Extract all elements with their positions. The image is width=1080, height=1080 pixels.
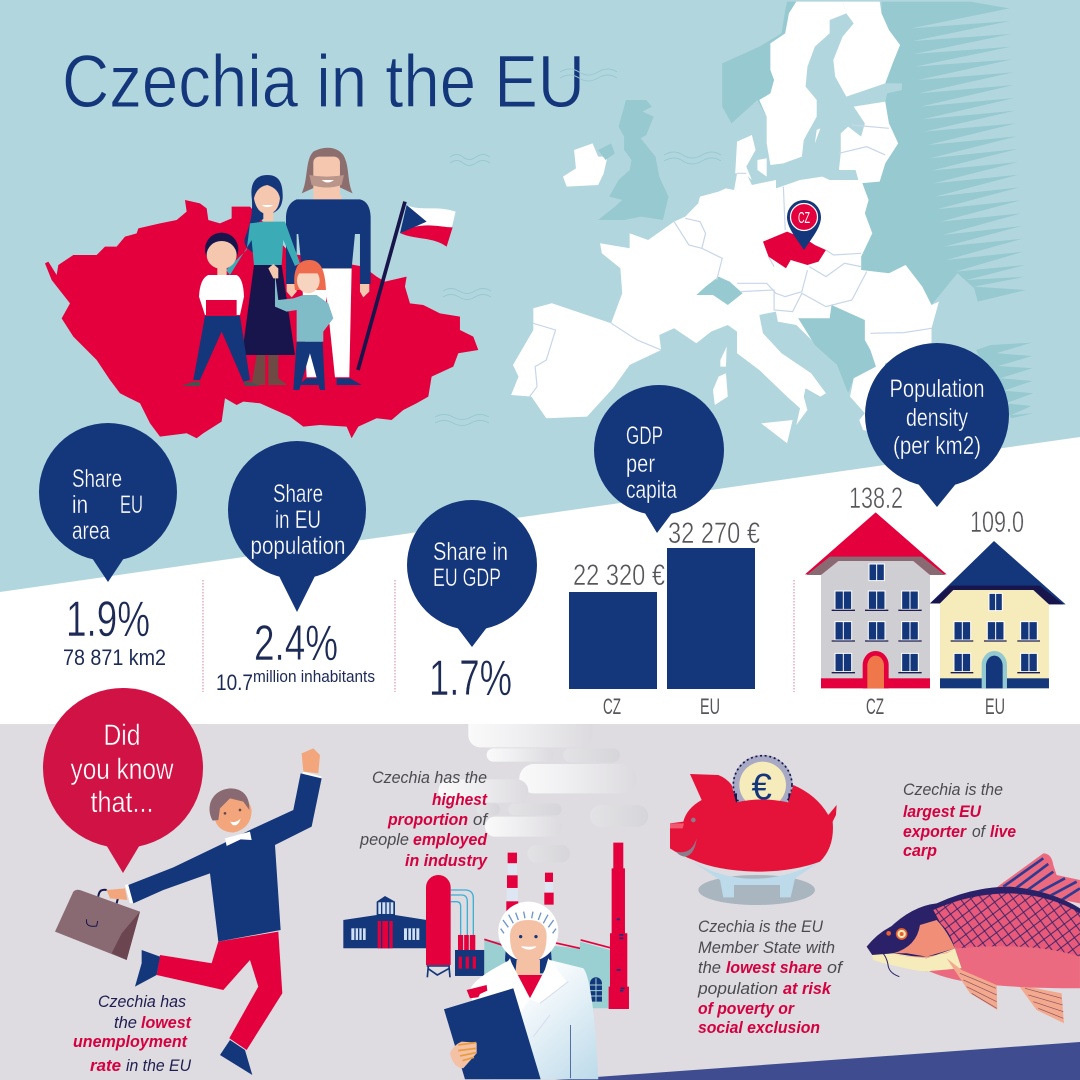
fact: highest proportion employed in industry: Czechia has the: [372, 768, 487, 787]
map of Europe: [511, 2, 1033, 443]
fact: highest proportion employed in industry: in industry: [405, 851, 488, 870]
Finland: [833, 2, 900, 97]
fact: lowest unemployment: [73, 992, 192, 1075]
dotted dividers: [203, 580, 794, 692]
Denmark: [735, 135, 756, 180]
value 109.0: 109.0: [970, 506, 1024, 539]
father: [286, 148, 371, 385]
bubble: did you know that: Did: [104, 719, 140, 752]
continental Europe: [511, 173, 939, 433]
piggy bank with euro coin: [670, 755, 837, 905]
Danish islands: [757, 158, 767, 177]
stat: population 2.4%: [216, 615, 375, 695]
bubble: share in EU area: in: [72, 491, 88, 519]
scales: [930, 892, 1080, 957]
bar chart: GDP per capita: 32 270 €: [668, 517, 760, 550]
striped chimneys: [506, 853, 554, 911]
fact: lowest unemployment: Czechia has: [98, 992, 186, 1011]
bubble: did you know that: you know: [70, 753, 174, 786]
bubble: share in EU area: Share: [72, 465, 122, 493]
flag and pole: [358, 202, 456, 370]
background: sky blue: [0, 0, 1080, 600]
fact: lowest share at risk of poverty: social exclusion: [698, 1018, 820, 1037]
bubble: share in EU population: in EU: [275, 506, 321, 534]
euro coin: [733, 755, 793, 815]
industry illustration: [343, 724, 648, 1079]
boy: [182, 233, 260, 386]
bubble: share in EU population: population: [250, 532, 346, 560]
pectoral fin: [947, 958, 997, 1010]
eye: [897, 929, 907, 939]
pig mouth: [676, 838, 697, 857]
fact: highest proportion employed in industry: people: [359, 830, 409, 849]
head: [867, 919, 962, 972]
dorsal fin: [997, 853, 1080, 903]
fact: highest proportion employed in industry: proportion: [387, 810, 468, 829]
bubble: share in EU area: [39, 423, 177, 582]
stat: area 1.9%: [63, 591, 166, 670]
carp fish: [867, 853, 1080, 1023]
Sweden: [759, 2, 846, 165]
stat: GDP 1.7%: 1.7%: [429, 650, 512, 706]
Corsica: [720, 347, 727, 367]
body: [927, 887, 1080, 988]
bubble: share in EU area: area: [72, 517, 110, 545]
Sardinia: [713, 373, 728, 405]
houses: population density comparison: [805, 482, 1066, 719]
fact: highest proportion employed in industry: employed: [413, 830, 488, 849]
briefcase: [55, 888, 140, 960]
Czech map with family: [45, 148, 478, 438]
fact: lowest share at risk of poverty: of poverty or: [698, 999, 795, 1018]
map pin: CZ: [787, 200, 821, 250]
Czechia on the map: [763, 232, 826, 268]
fin rays: [960, 973, 1063, 1018]
bubble: did you know that: that...: [90, 786, 154, 819]
pig legs and belly: [690, 860, 820, 897]
Turkey stripes: [976, 343, 1033, 418]
fact: largest EU exporter of live carp: largest EU: [903, 802, 982, 821]
stat: area 1.9%: 1.9%: [66, 591, 150, 647]
red silo and pipes: [426, 875, 484, 977]
teal factory building: [484, 939, 610, 1008]
white band: [0, 437, 1080, 723]
bubble: GDP per capita: [594, 385, 724, 533]
bubble: share in EU GDP: EU GDP: [433, 564, 501, 592]
dark back: [880, 887, 1080, 967]
Russia and eastern land with striped edge: [861, 2, 1026, 305]
pelvic fin: [1018, 985, 1064, 1023]
bubble: did you know that: [43, 688, 203, 873]
pig ear: [691, 818, 696, 822]
fact: lowest share at risk of poverty: Czechia is the EU: [698, 917, 824, 936]
house CZ: [805, 512, 947, 688]
grey lower section: [0, 724, 1080, 1080]
Ireland: [563, 143, 607, 187]
bar chart: GDP per capita: EU: [700, 694, 720, 719]
bubble: GDP per capita: GDP: [626, 422, 663, 450]
fact: largest EU exporter of live carp: [903, 780, 1016, 860]
euro coin: €: [751, 766, 772, 807]
Switzerland: [696, 277, 743, 305]
gill plate: [893, 920, 955, 957]
Northern Ireland: [598, 143, 615, 160]
fact: lowest share at risk of poverty: at risk: [783, 979, 832, 998]
fact: lowest unemployment: unemployment: [73, 1032, 188, 1051]
Gotland: [815, 128, 820, 143]
fact: lowest share at risk of poverty: population: [697, 979, 778, 998]
fact: lowest share at risk of poverty: Member State with: [698, 938, 835, 957]
fact: largest EU exporter of live carp: carp: [903, 841, 937, 860]
fact: lowest unemployment: the: [114, 1013, 137, 1032]
tall red chimney: [609, 843, 629, 1009]
fact: lowest unemployment: rate: [90, 1056, 121, 1075]
bubble: GDP per capita: per: [626, 450, 655, 478]
pig snout: [670, 823, 684, 828]
barbel: [877, 948, 899, 977]
fact: lowest unemployment: in the EU: [126, 1056, 192, 1075]
label EU: EU: [985, 694, 1005, 719]
fact: lowest share at risk of poverty: [697, 917, 844, 1037]
pig body: [670, 774, 837, 872]
title: Czechia in the EU: [62, 40, 585, 123]
stat: population 2.4%: 10.7: [216, 670, 253, 695]
bubble: population density: (per km2): [893, 432, 981, 460]
navy factory hall: [343, 896, 427, 948]
jaw: [872, 948, 962, 972]
Czech Republic silhouette: [45, 200, 478, 438]
country borders: [530, 125, 932, 397]
factory worker: [444, 902, 598, 1079]
bottom navy wedge: [555, 1042, 1080, 1080]
fact: highest proportion employed in industry: [359, 768, 489, 870]
jumping businessman: [55, 748, 322, 1075]
bubble: share in EU population: Share: [273, 480, 323, 508]
label CZ: CZ: [866, 694, 884, 719]
girl: [268, 260, 333, 390]
fact: largest EU exporter of live carp: live: [990, 822, 1016, 841]
bubble: population density: [865, 343, 1009, 507]
smoke: [438, 724, 648, 862]
stat: area 1.9%: 78 871 km2: [63, 645, 166, 670]
bar chart: GDP per capita: 22 320 €: [573, 559, 665, 592]
fact: lowest share at risk of poverty: lowest share: [726, 958, 822, 977]
fact: largest EU exporter of live carp: Czechia is the: [903, 780, 1003, 799]
bar chart: GDP per capita: [569, 517, 760, 719]
fact: lowest share at risk of poverty: the: [698, 958, 721, 977]
mother: [226, 175, 300, 385]
bubble: population density: Population: [890, 375, 984, 403]
house EU: [930, 541, 1066, 688]
bubble: population density: density: [906, 404, 968, 432]
bubble: share in EU area: EU: [120, 491, 143, 519]
bubble: share in EU population: [228, 441, 366, 612]
bar chart: GDP per capita: CZ: [603, 694, 621, 719]
bubble: share in EU GDP: Share in: [433, 538, 508, 566]
stat: population 2.4%: 2.4%: [254, 615, 338, 671]
fact: highest proportion employed in industry: highest: [432, 790, 488, 809]
fact: lowest unemployment: lowest: [141, 1013, 192, 1032]
Norway: [722, 2, 796, 123]
fact: largest EU exporter of live carp: of: [972, 822, 987, 841]
shadow: [698, 875, 815, 905]
sea waves: [435, 69, 721, 426]
bubble: share in EU GDP: [407, 500, 537, 647]
fact: lowest share at risk of poverty: of: [827, 958, 844, 977]
bubble: GDP per capita: capita: [626, 476, 677, 504]
fact: largest EU exporter of live carp: exporter: [903, 822, 967, 841]
Great Britain: [598, 100, 669, 220]
Sicily: [761, 420, 793, 443]
fact: highest proportion employed in industry: of: [473, 810, 489, 829]
Baltic states: [839, 102, 898, 183]
western Balkans: [798, 305, 876, 393]
stat: population 2.4%: million inhabitants: [253, 667, 375, 686]
value 138.2: 138.2: [849, 482, 903, 515]
map pin: CZ: CZ: [798, 210, 810, 227]
